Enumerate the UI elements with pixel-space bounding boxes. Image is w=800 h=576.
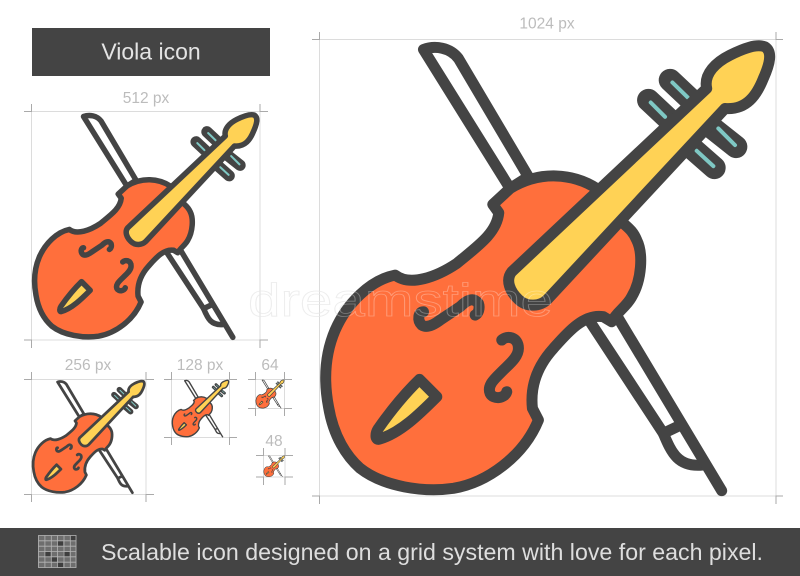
- panel: 48 px icon: [256, 433, 293, 485]
- icon: pixel grid: [38, 535, 76, 568]
- panel: 128 px icon: 128 px: [177, 357, 224, 374]
- panel: 64 px icon: 64: [261, 357, 279, 374]
- panel: 1024 px icon: 1024 px: [519, 16, 575, 32]
- panel: 48 px icon: 48: [265, 433, 283, 450]
- watermark overlay: dreamstime: [248, 274, 553, 326]
- footer text: Scalable icon designed on a grid system with love for each pixel.: [101, 539, 763, 565]
- panel: 256 px icon: 256 px: [65, 357, 112, 374]
- watermark: dreamstime: [248, 274, 553, 326]
- panel: 256 px icon: [24, 357, 154, 502]
- panel: 512 px icon: [24, 90, 268, 348]
- panel: 64 px icon: [248, 357, 292, 416]
- panel: 128 px icon: [164, 357, 237, 445]
- footer bar: [0, 528, 800, 576]
- panel: 512 px icon: 512 px: [123, 90, 170, 107]
- title banner: Viola icon: [101, 38, 201, 64]
- title banner: [32, 28, 270, 76]
